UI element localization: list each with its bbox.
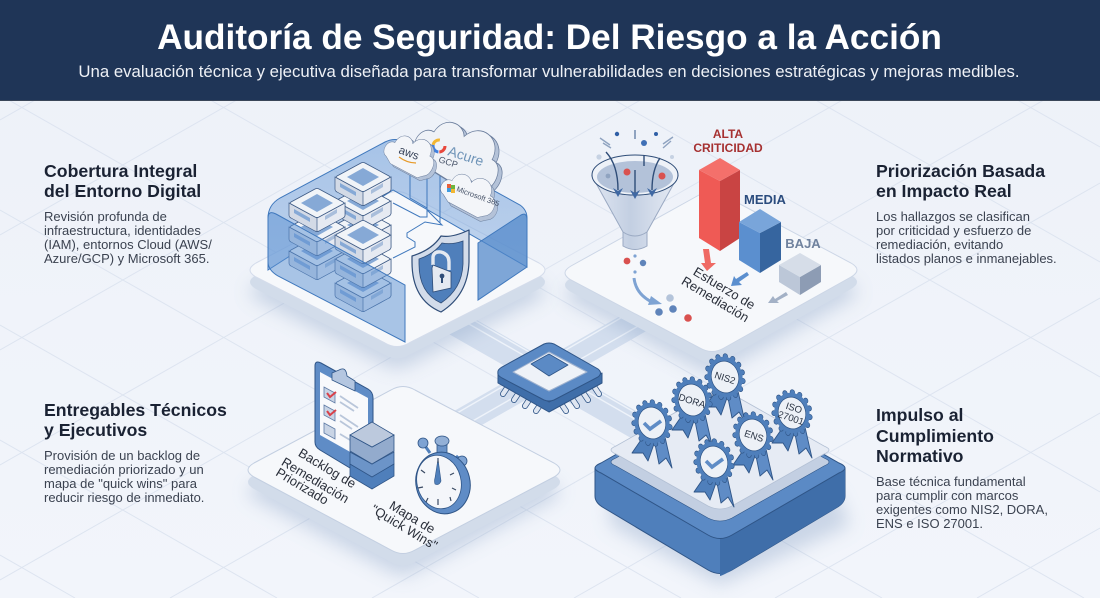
text block: cobertura integral: infraestructura, identidades <box>44 223 201 238</box>
text block: cumplimiento: para cumplir con marcos <box>876 488 1019 503</box>
text block: cobertura integral <box>44 161 212 266</box>
label: mapa quick wins: "Quick Wins" <box>368 501 441 553</box>
bar: alta criticidad: ALTA <box>713 127 743 141</box>
panel: deliverables <box>248 362 560 576</box>
badge: ISO 27001 <box>769 388 815 458</box>
text block: cobertura integral: Azure/GCP) y Microsoft 365. <box>44 251 209 266</box>
badge: ENS: ENS <box>743 428 765 445</box>
bar: media <box>731 192 787 286</box>
bar: baja: BAJA <box>785 236 821 251</box>
blue base block <box>595 468 845 574</box>
icon: cloud AWS <box>379 125 446 185</box>
text block: cobertura integral: (IAM), entornos Cloud (AWS/ <box>44 237 212 252</box>
icon: cloud Azure and GCP: Acure <box>446 143 486 169</box>
badge: DORA <box>669 375 715 445</box>
text block: priorizacion: por criticidad y esfuerzo de <box>876 223 1031 238</box>
text block: entregables: mapa de "quick wins" para <box>44 476 198 491</box>
glass wall front left <box>268 213 405 342</box>
text block: cumplimiento: Impulso al <box>876 405 963 425</box>
panel: compliance <box>595 352 850 585</box>
bar: media: MEDIA <box>744 192 787 207</box>
text block: priorizacion: Los hallazgos se clasifican <box>876 209 1030 224</box>
icon: funnel <box>592 130 678 250</box>
badge: ISO 27001: ISO <box>784 401 803 416</box>
label: esfuerzo de remediacion: Remediación <box>679 273 752 325</box>
text block: entregables: Entregables Técnicos <box>44 400 227 420</box>
text block: cobertura integral: del Entorno Digital <box>44 181 201 201</box>
text block: cumplimiento: Cumplimiento <box>876 426 994 446</box>
text block: entregables: reducir riesgo de inmediato. <box>44 490 204 505</box>
text block: priorizacion: listados planos e inmanejables. <box>876 251 1057 266</box>
bar: alta criticidad <box>693 127 763 271</box>
badge: check front <box>691 437 737 507</box>
subtitle: Una evaluación técnica y ejecutiva diseñada para transformar vulnerabilidades en decisiones estratégicas y mejoras medibles. <box>78 62 1020 81</box>
light platform <box>611 403 829 521</box>
label: backlog: Backlog de <box>296 445 359 491</box>
icon: central chip <box>498 343 602 412</box>
label: backlog: Remediación <box>279 454 352 506</box>
text block: entregables <box>44 400 227 505</box>
label: mapa quick wins: Mapa de <box>387 498 438 537</box>
glass wall back <box>268 140 527 270</box>
text block: cumplimiento: exigentes como NIS2, DORA, <box>876 502 1048 517</box>
text block: entregables: remediación priorizado y un <box>44 462 204 477</box>
text block: entregables: Provisión de un backlog de <box>44 448 200 463</box>
header bar <box>0 0 1100 101</box>
icon: cloud Azure and GCP <box>406 103 518 205</box>
text block: priorizacion: remediación, evitando <box>876 237 1003 252</box>
text block: cumplimiento: Normativo <box>876 446 964 466</box>
label: esfuerzo de remediacion: Esfuerzo de <box>691 264 758 312</box>
server racks <box>289 162 391 312</box>
badge: ENS <box>730 410 776 480</box>
badge: DORA: DORA <box>677 392 707 411</box>
title: Auditoría de Seguridad: Del Riesgo a la Acción <box>157 18 942 57</box>
icon: cloud Azure and GCP: GCP <box>437 154 459 170</box>
glass wall front right <box>478 214 527 300</box>
text block: cumplimiento: ENS e ISO 27001. <box>876 516 983 531</box>
text block: cumplimiento <box>876 405 1048 531</box>
text block: priorizacion: en Impacto Real <box>876 181 1012 201</box>
badge: ISO 27001: 27001 <box>776 409 805 428</box>
bar: alta criticidad: CRITICIDAD <box>693 141 763 155</box>
panel: infrastructure coverage <box>250 103 545 368</box>
text block: cumplimiento: Base técnica fundamental <box>876 474 1026 489</box>
icon: cloud Microsoft 365: Microsoft 365 <box>455 184 501 208</box>
text block: entregables: y Ejecutivos <box>44 420 147 440</box>
icon: data stack <box>350 422 394 489</box>
text block: priorizacion: Priorización Basada <box>876 161 1045 181</box>
icon: clipboard <box>315 362 373 468</box>
label: backlog: Priorizado <box>273 465 331 508</box>
panel: prioritization <box>565 127 857 374</box>
falling dots and arrow <box>624 254 692 322</box>
connectors between panels and chip <box>440 304 690 451</box>
icon: stopwatch <box>409 436 477 520</box>
icon: cloud AWS: aws <box>397 145 421 163</box>
text block: cobertura integral: Revisión profunda de <box>44 209 167 224</box>
bar: baja <box>768 236 821 303</box>
badge: NIS2 <box>702 352 748 422</box>
text block: cobertura integral: Cobertura Integral <box>44 161 197 181</box>
icon: shield with padlock <box>412 230 469 312</box>
icon: cloud Microsoft 365 <box>436 163 507 226</box>
badge: NIS2: NIS2 <box>713 370 737 387</box>
badge: check left <box>629 398 675 468</box>
circuit lines <box>393 167 442 258</box>
text block: priorizacion <box>876 161 1057 266</box>
